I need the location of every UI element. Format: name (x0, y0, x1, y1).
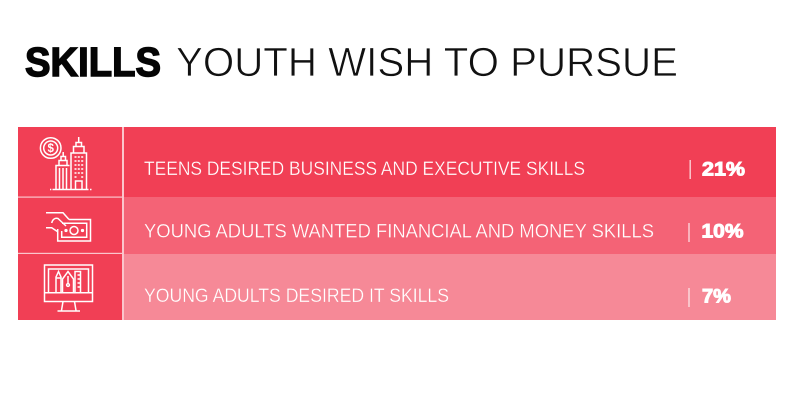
row: young adults IT skills: YOUNG ADULTS DESIRED IT SKILLS (144, 286, 449, 307)
row: young adults financial and money skills: YOUNG ADULTS WANTED FINANCIAL AND MONEY SKILLS (144, 222, 654, 242)
icon: hand holding banknote (46, 213, 90, 241)
icon: city buildings with dollar coin (40, 137, 92, 190)
row: young adults IT skills: 7% (702, 286, 731, 308)
row: young adults financial and money skills: 10% (702, 222, 744, 242)
icon: city buildings with dollar coin: $ (47, 143, 54, 155)
row: teens business and executive skills (124, 127, 776, 197)
row: teens business and executive skills: TEENS DESIRED BUSINESS AND EXECUTIVE SKILLS (144, 159, 585, 180)
panel: icon column (18, 127, 124, 320)
title: SKILLS (25, 39, 161, 85)
icon: desktop monitor with design tools (44, 265, 92, 311)
row: teens business and executive skills: 21% (702, 160, 745, 180)
row: young adults financial and money skills (124, 197, 776, 254)
row: young adults IT skills (124, 254, 776, 320)
title: YOUTH WISH TO PURSUE (176, 39, 678, 85)
